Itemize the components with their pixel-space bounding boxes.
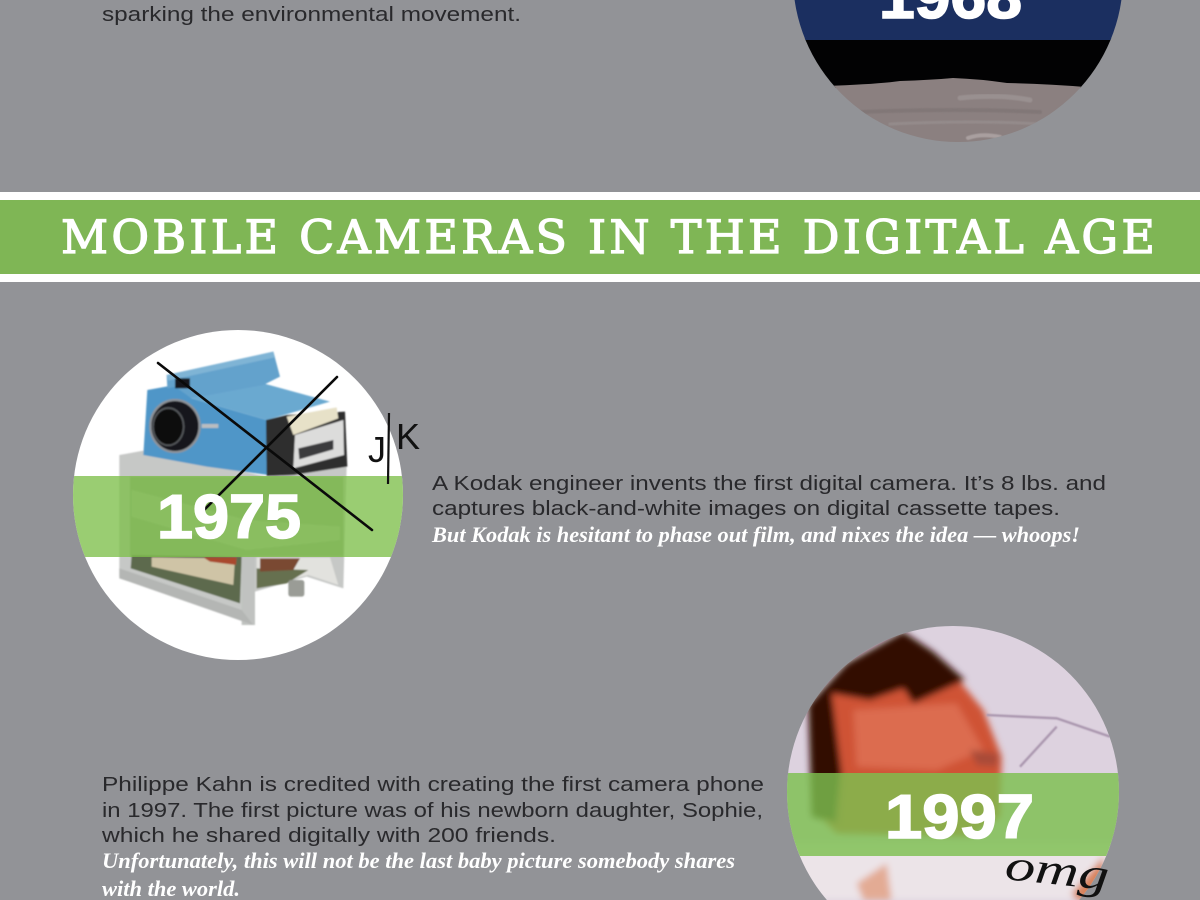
text block: 1997 description: which he shared digitally with 200 friends. (101, 825, 556, 847)
handwritten note: J/K (368, 413, 420, 484)
section banner (0, 192, 1200, 282)
note letters: J (368, 429, 386, 470)
baby photo illustration (783, 632, 1123, 900)
photo circle: 1968 moon horizon (790, 0, 1130, 145)
text block: 1997 description: Philippe Kahn is credited with creating the first camera phone (102, 774, 764, 796)
moon surface (825, 78, 1085, 145)
moon texture (860, 96, 1040, 138)
camera illustration (119, 352, 347, 625)
X cross-out (158, 363, 372, 530)
black space (790, 38, 1130, 88)
text block: 1997 description (101, 774, 764, 900)
handwritten note: omg: omg (1003, 840, 1112, 900)
year: 1997: 1997 (885, 783, 1034, 852)
year: 1975: 1975 (157, 483, 301, 552)
text block: 1968 caption ending: sparking the environmental movement. (102, 4, 521, 26)
script aside: Unfortunately, this will not be the last baby picture somebody shares (102, 848, 735, 873)
banner heading: MOBILE CAMERAS IN THE DIGITAL AGE (61, 210, 1155, 264)
green year band (70, 476, 410, 557)
text block: 1997 description: in 1997. The first picture was of his newborn daughter, Sophie, (102, 800, 763, 822)
photo circle: 1997 newborn Sophie (780, 620, 1125, 900)
text block: 1975 description (431, 473, 1106, 547)
note letters: K (396, 416, 420, 457)
photo circle: 1975 Kodak digital camera (70, 330, 410, 660)
green year band (780, 773, 1125, 856)
text block: 1975 description: captures black-and-white images on digital cassette tapes. (432, 498, 1060, 520)
script aside: But Kodak is hesitant to phase out film, and nixes the idea — whoops! (431, 522, 1080, 547)
text block: 1975 description: A Kodak engineer invents the first digital camera. It’s 8 lbs. and (432, 473, 1106, 495)
navy year band (790, 0, 1130, 40)
